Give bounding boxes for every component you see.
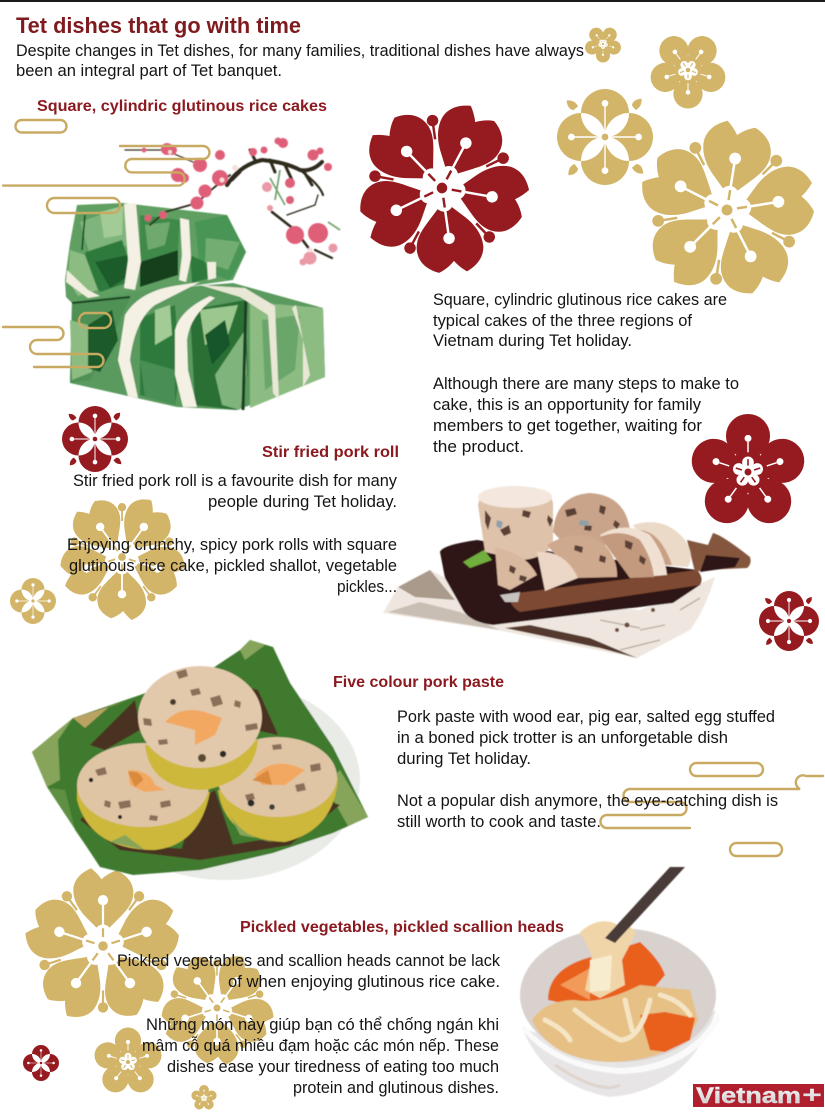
text block: rice cakes: typical cakes of the three regions of — [433, 312, 692, 330]
text block: stir fried pork roll: people during Tet holiday. — [208, 493, 397, 511]
text block: five colour pork paste: in a boned pick trotter is an unforgetable dish — [397, 729, 728, 747]
top border — [0, 0, 825, 2]
title: Tet dishes that go with time — [16, 13, 301, 38]
text block: pickled vegetables — [117, 952, 501, 1097]
top rice cake — [65, 203, 246, 303]
text block: five colour pork paste: during Tet holiday. — [397, 750, 531, 768]
text block: five colour pork paste: still worth to cook and taste. — [397, 813, 601, 831]
flower: gold plum top right — [647, 30, 729, 109]
text block: pickled vegetables: Những món này giúp bạn có thể chống ngán khi — [146, 1016, 499, 1034]
left pork round — [77, 743, 210, 850]
text block: stir fried pork roll: glutinous rice cake, pickled shallot, vegetable — [69, 557, 397, 575]
flower: gold plum bottom — [91, 1028, 165, 1098]
flower: large red blossom — [319, 69, 564, 310]
logo: Vietnam+: Vietnam — [696, 1083, 801, 1108]
bottom rice cake — [70, 282, 325, 410]
text block: rice cakes: cake, this is an opportunity for family — [433, 396, 702, 414]
pork slices — [478, 486, 691, 591]
banana leaf — [32, 640, 368, 875]
logo: Vietnam+ — [693, 1082, 824, 1109]
intro text — [16, 42, 584, 80]
decorative cloud: lower right capsule — [730, 843, 782, 856]
flower: large gold blossom — [620, 108, 825, 315]
flower: small gold plum — [583, 25, 623, 62]
text block: five colour pork paste: Pork paste with wood ear, pig ear, salted egg stuffed — [397, 708, 775, 726]
intro text: Despite changes in Tet dishes, for many families, traditional dishes have always — [16, 42, 584, 60]
text block: pickled vegetables: mâm cỗ quá nhiều đạm hoặc các món nếp. These — [142, 1036, 499, 1055]
right pork round — [217, 737, 338, 842]
intro text: been an integral part of Tet banquet. — [16, 62, 282, 80]
top pork round — [138, 666, 262, 790]
illustration: pickled vegetables bowl with chopsticks — [520, 867, 720, 1097]
flower: tiny gold plum bottom — [190, 1085, 218, 1111]
text block: stir fried pork roll: pickles... — [337, 578, 397, 596]
text block: five colour pork paste — [397, 708, 778, 831]
heading: stir fried pork roll: Stir fried pork roll — [262, 444, 399, 461]
text block: stir fried pork roll — [67, 472, 398, 596]
flower: small red four-lobed bottom — [23, 1045, 59, 1081]
text block: pickled vegetables: protein and glutinous dishes. — [293, 1079, 499, 1097]
text block: rice cakes — [433, 291, 739, 456]
decorative cloud: right swirl — [601, 775, 823, 828]
decorative cloud: capsule over rice cake — [47, 198, 120, 213]
blossom branch — [125, 138, 340, 266]
text block: rice cakes: Vietnam during Tet holiday. — [433, 332, 632, 350]
flower: gold blossom behind pickled text — [156, 949, 278, 1065]
plate — [90, 680, 360, 880]
illustration: stir fried pork roll on a wooden board — [383, 486, 751, 658]
decorative cloud: upper-left swirl — [3, 146, 210, 186]
flower: gold blossom left — [54, 492, 189, 620]
pickles — [532, 921, 698, 1062]
text block: rice cakes: the product. — [433, 438, 524, 456]
flower: red plum right — [686, 414, 810, 532]
flower: gold blossom lower left — [20, 868, 186, 1027]
text block: rice cakes: Square, cylindric glutinous rice cakes are — [433, 291, 727, 309]
flower: red four-lobed right — [759, 591, 819, 651]
decorative cloud: small capsule over rice cake — [79, 313, 111, 328]
heading: rice cakes: Square, cylindric glutinous rice cakes — [37, 98, 327, 115]
illustration: square glutinous rice cakes with blossom branch — [65, 138, 340, 410]
heading: five colour pork paste: Five colour pork paste — [333, 674, 504, 691]
text block: pickled vegetables: of when enjoying glutinous rice cake. — [228, 973, 500, 991]
bowl — [520, 928, 720, 1097]
chopsticks — [605, 867, 685, 943]
illustration: five colour pork paste on banana leaf — [32, 640, 368, 880]
board — [440, 533, 751, 625]
cloth — [383, 570, 715, 658]
decorative cloud: upper-left capsule — [16, 120, 66, 132]
decorative cloud: lower-left swirl — [3, 327, 104, 367]
flower: gold four-lobed top — [557, 89, 653, 185]
flower: red four-lobed left — [62, 406, 128, 472]
text block: pickled vegetables: Pickled vegetables and scallion heads cannot be lack — [117, 952, 501, 970]
text block: pickled vegetables: dishes ease your tiredness of eating too much — [167, 1058, 499, 1076]
text block: stir fried pork roll: Enjoying crunchy, spicy pork rolls with square — [67, 536, 397, 554]
heading: pickled vegetables: Pickled vegetables, pickled scallion heads — [240, 919, 564, 936]
text block: rice cakes: members to get together, waiting for — [433, 417, 703, 435]
logo: Vietnam+: + — [802, 1082, 822, 1109]
text block: stir fried pork roll: Stir fried pork roll is a favourite dish for many — [73, 472, 398, 490]
flower: small gold four-lobed left — [10, 578, 56, 624]
text block: five colour pork paste: Not a popular dish anymore, the eye-catching dish is — [397, 792, 778, 810]
decorative cloud: right capsule — [690, 763, 763, 776]
text block: rice cakes: Although there are many steps to make to — [433, 375, 739, 393]
